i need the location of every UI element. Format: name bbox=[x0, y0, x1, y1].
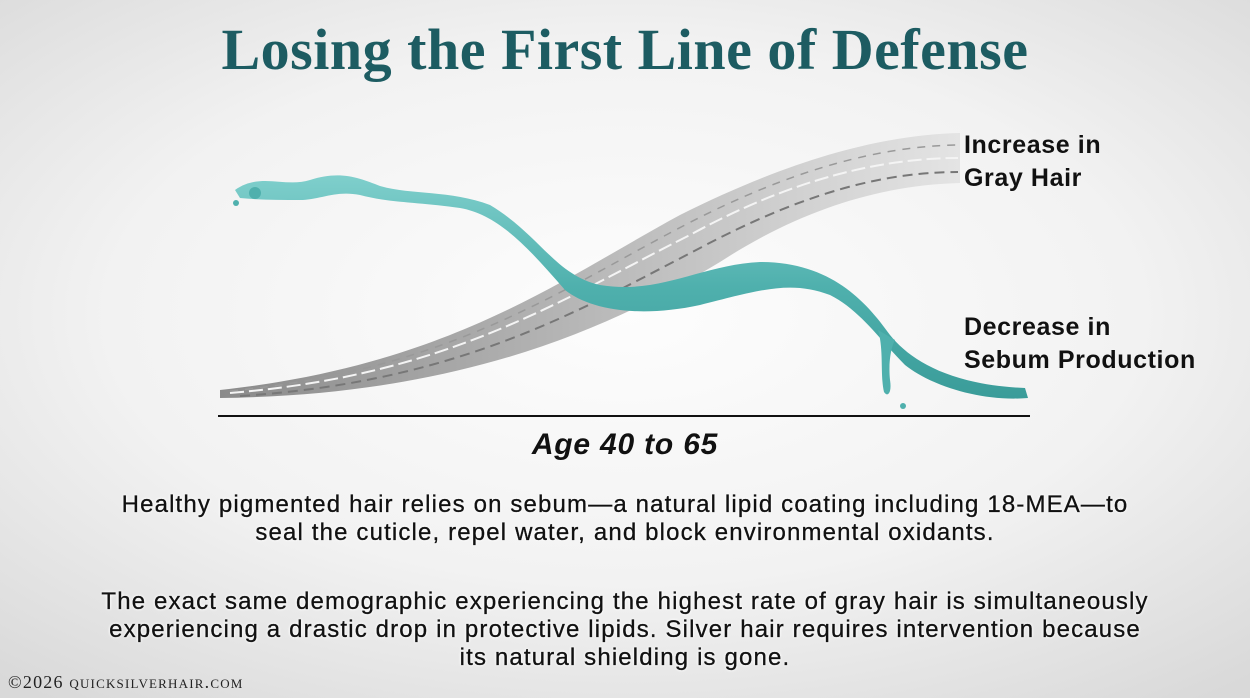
paragraph 2: its natural shielding is gone. bbox=[460, 644, 790, 671]
label: sebum: Decrease in bbox=[964, 313, 1111, 341]
label: gray hair bbox=[964, 131, 1101, 192]
paragraph 1: seal the cuticle, repel water, and block environmental oxidants. bbox=[255, 519, 995, 546]
axis label: Age 40 to 65 bbox=[532, 428, 718, 461]
label: sebum bbox=[964, 313, 1196, 374]
label: gray hair: Increase in bbox=[964, 131, 1101, 159]
axis bbox=[218, 415, 1030, 417]
sebum teal ribbon bbox=[233, 175, 1028, 409]
paragraph 2: The exact same demographic experiencing the highest rate of gray hair is simultaneously bbox=[101, 588, 1149, 615]
paragraph 1: Healthy pigmented hair relies on sebum—a natural lipid coating including 18-MEA—to bbox=[122, 491, 1128, 518]
title: Losing the First Line of Defense bbox=[222, 17, 1028, 82]
gray hair rope bbox=[220, 133, 960, 398]
label: gray hair: Gray Hair bbox=[964, 164, 1082, 192]
footer copyright: ©2026 quicksilverhair.com bbox=[8, 672, 244, 692]
paragraph 1 bbox=[122, 491, 1128, 546]
label: sebum: Sebum Production bbox=[964, 346, 1196, 374]
paragraph 2: experiencing a drastic drop in protective lipids. Silver hair requires intervention because bbox=[109, 616, 1141, 643]
paragraph 2 bbox=[101, 588, 1149, 671]
